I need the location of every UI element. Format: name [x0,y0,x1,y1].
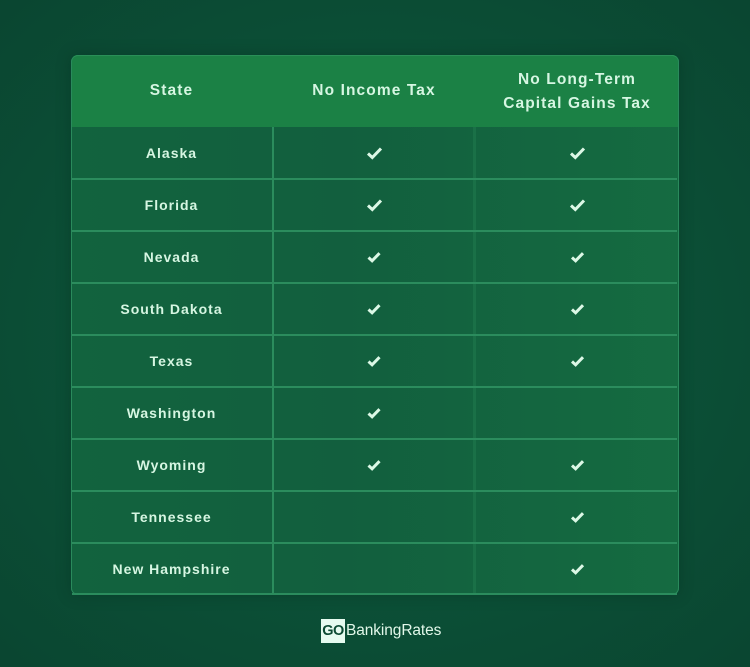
header: No Long-Term Capital Gains Tax: No Long-Term [518,71,636,88]
state names: Wyoming [137,457,206,473]
header: State: State [150,82,193,99]
state names: Texas [150,353,193,369]
state names: South Dakota [120,301,223,317]
header: No Long-Term Capital Gains Tax [503,71,651,112]
state names: Washington [127,405,216,421]
table outer border [71,55,679,595]
logo wordmark: BankingRates [346,622,441,639]
state names: New Hampshire [112,561,231,577]
state names: Florida [145,197,198,213]
header: No Income Tax: No Income Tax [312,82,436,99]
state names [112,145,231,577]
state names: Alaska [146,145,197,161]
body tint [71,127,679,595]
table panel [71,55,679,595]
state names: Tennessee [131,509,212,525]
logo badge: GO [322,623,344,639]
logo: GOBankingRates [321,619,441,643]
logo badge [321,619,345,643]
table header band [71,55,679,127]
column divider 1 [272,127,274,594]
state names: Nevada [144,249,199,265]
header: No Long-Term Capital Gains Tax: Capital Gains Tax [503,95,651,112]
column divider 2 [473,127,476,594]
